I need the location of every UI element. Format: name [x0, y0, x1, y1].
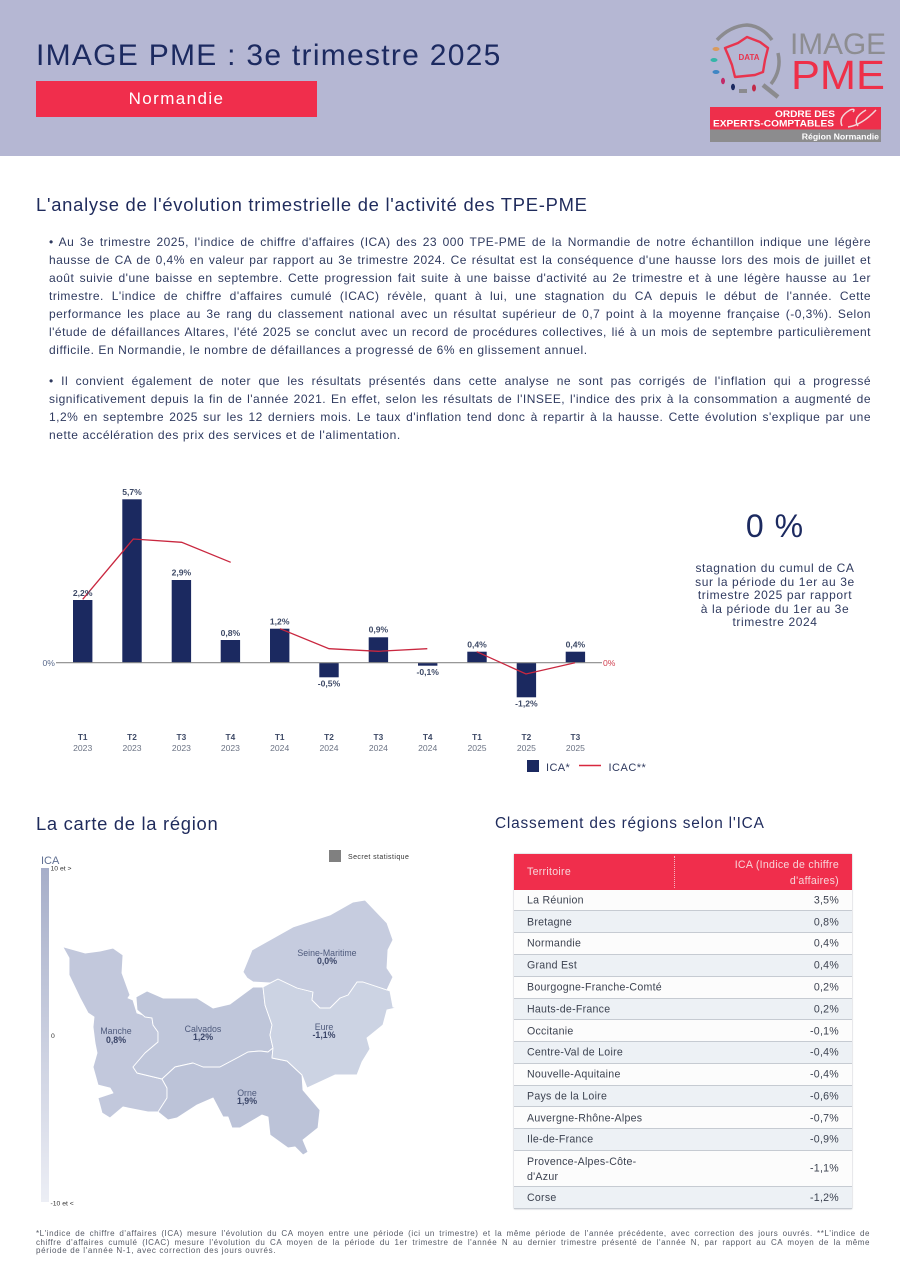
- order banner: ORDRE DES: [775, 109, 836, 120]
- zero axis: [56, 662, 602, 664]
- department labels: [100, 948, 357, 1098]
- department values: 0,8%: [106, 1035, 126, 1045]
- text block: paragraph 2: significativement depuis la fin de l'année 2021. En effet, selon les résultats de l'INSEE, l'indice des prix à la consommation a augmenté de: [49, 392, 871, 406]
- value labels: 0,4%: [467, 640, 487, 650]
- text block: paragraph 1: hausse de CA de 0,4% en valeur par rapport au 3e trimestre 2024. Ce résultat est la conséquence d'une hausse lors des mois de juillet et: [49, 253, 871, 267]
- table rows: Occitanie: [527, 1025, 574, 1037]
- year labels: 2024: [270, 743, 289, 753]
- statistical secret legend: Secret statistique: [348, 854, 409, 861]
- icon: coloured dots: [710, 47, 756, 93]
- table rows: 0,2%: [814, 1004, 839, 1016]
- icon: magnifier: [717, 25, 779, 97]
- text block: paragraph 1: août suivie d'une baisse en septembre. Cette progression fait suite à une baisse d'activité au 2e trimestre et à une légère hausse au 1er: [49, 271, 871, 285]
- text block: paragraph 1: trimestre. L'indice de chiffre d'affaires cumulé (ICAC) révèle, quant à lui, une stagnation du CA depuis le début de l'année. Cette: [49, 289, 871, 303]
- year labels: 2025: [467, 743, 487, 753]
- value labels: [73, 487, 586, 708]
- table rows: 0,2%: [814, 982, 839, 994]
- department values: 0,0%: [317, 956, 337, 966]
- quarter labels: T2: [522, 732, 532, 742]
- quarter labels: T3: [571, 732, 581, 742]
- value labels: -0,1%: [416, 667, 439, 677]
- table rows: Hauts-de-France: [527, 1004, 610, 1016]
- department labels: Manche: [100, 1026, 132, 1036]
- order banner: [710, 107, 881, 142]
- table header: ICA (Indice de chiffre: [735, 859, 839, 871]
- department labels: Orne: [237, 1088, 257, 1098]
- year labels: 2025: [517, 743, 536, 753]
- KPI description: trimestre 2024: [732, 615, 818, 629]
- heading: map: La carte de la région: [36, 813, 218, 834]
- value labels: 0,9%: [369, 624, 389, 634]
- table rows: Grand Est: [527, 960, 577, 972]
- department values: [106, 956, 337, 1106]
- table rows: 0,8%: [814, 916, 839, 928]
- legend: [527, 760, 647, 774]
- year labels: 2023: [221, 743, 240, 753]
- KPI description: [695, 561, 855, 629]
- axis zero labels: 0%: [603, 658, 616, 668]
- footnote: [36, 1229, 870, 1255]
- year labels: 2024: [418, 743, 437, 753]
- logo wordmark IMAGE: IMAGE: [790, 28, 886, 61]
- table rows: Corse: [527, 1192, 557, 1204]
- footnote: *L'indice de chiffre d'affaires (ICA) mesure l'évolution du CA moyen entre une période (ici un trimestre) et la même période de l'année précédente, avec correction des jours ouvrés. **L'indice de: [36, 1229, 870, 1238]
- text block: paragraph 2: 1,2% en septembre 2025 sur les 12 derniers mois. Le taux d'inflation tend donc à repartir à la hausse. Cette évolution s'explique par une: [49, 410, 871, 424]
- table rows: -0,9%: [810, 1134, 839, 1146]
- table header: Territoire: [527, 866, 571, 878]
- KPI description: sur la période du 1er au 3e: [695, 574, 855, 588]
- text block: paragraph 1: difficile. En Normandie, le nombre de défaillances a progressé de 6% en glissement annuel.: [49, 343, 588, 357]
- value labels: 1,2%: [270, 616, 290, 626]
- colour scale legend: [41, 855, 74, 1208]
- colour scale legend: ICA: [41, 855, 60, 867]
- map of Normandie: [41, 850, 409, 1208]
- year labels: 2025: [566, 743, 585, 753]
- KPI description: à la période du 1er au 3e: [701, 602, 849, 616]
- heading: ranking: Classement des régions selon l'ICA: [495, 815, 765, 832]
- table rows: d'Azur: [527, 1171, 558, 1183]
- KPI value: 0 %: [746, 508, 804, 544]
- table rows: Normandie: [527, 938, 581, 950]
- department: Orne: [158, 1048, 320, 1155]
- table rows: Centre-Val de Loire: [527, 1047, 623, 1059]
- ranking table: [514, 854, 852, 1209]
- text block: paragraph 1: [49, 235, 871, 357]
- department values: 1,2%: [193, 1032, 213, 1042]
- value labels: 2,9%: [172, 568, 192, 578]
- table rows: -0,4%: [810, 1047, 839, 1059]
- legend: ICAC**: [608, 762, 647, 774]
- colour scale legend: 10 et >: [50, 866, 72, 872]
- value labels: 0,8%: [221, 628, 241, 638]
- header band: [0, 0, 900, 156]
- table rows: -1,1%: [810, 1163, 839, 1175]
- quarter labels: T3: [374, 732, 384, 742]
- table header: d'affaires): [790, 875, 839, 887]
- table rows: 0,4%: [814, 960, 839, 972]
- table rows: -1,2%: [810, 1192, 839, 1204]
- year labels: [73, 743, 585, 753]
- value labels: -0,5%: [318, 678, 341, 688]
- bars: ICA: [73, 499, 585, 697]
- value labels: -1,2%: [515, 698, 538, 708]
- value labels: 0,4%: [566, 640, 586, 650]
- text block: paragraph 2: [49, 374, 871, 442]
- text block: paragraph 2: • Il convient également de noter que les résultats présentés dans cette analyse ne sont pas corrigés de l'inflation qui a progressé: [49, 374, 871, 388]
- KPI: cumulative revenue: [695, 508, 855, 629]
- colour scale legend: -10 et <: [50, 1200, 74, 1208]
- axis zero labels: 0%: [42, 658, 55, 668]
- table rows: Bretagne: [527, 916, 572, 928]
- quarter labels: [78, 732, 581, 742]
- quarter labels: T2: [324, 732, 334, 742]
- quarter labels: T1: [78, 732, 88, 742]
- table rows: Bourgogne-Franche-Comté: [527, 982, 662, 994]
- quarter labels: T1: [275, 732, 285, 742]
- department labels: Calvados: [185, 1024, 222, 1034]
- quarter labels: T3: [177, 732, 187, 742]
- region badge: Normandie: [129, 89, 224, 108]
- table rows: Auvergne-Rhône-Alpes: [527, 1112, 642, 1124]
- footnote: chiffre d'affaires cumulé (ICAC) mesure l'évolution du CA moyen de la période du 1er trimestre de l'année N au dernier trimestre présenté de l'année N, par rapport au CA moyen de la même: [36, 1238, 870, 1247]
- table rows: -0,6%: [810, 1091, 839, 1103]
- table header: [514, 854, 852, 890]
- department: Seine-Maritime: [243, 900, 393, 1008]
- value labels: 2,2%: [73, 588, 93, 598]
- footnote: période de l'année N-1, avec correction des jours ouvrés.: [36, 1246, 276, 1255]
- order banner: EXPERTS-COMPTABLES: [713, 118, 835, 130]
- department values: 1,9%: [237, 1096, 257, 1106]
- department: Eure: [263, 979, 396, 1088]
- table rows: -0,4%: [810, 1069, 839, 1081]
- table rows: -0,1%: [810, 1025, 839, 1037]
- legend: ICA*: [546, 762, 571, 774]
- table rows: Pays de la Loire: [527, 1091, 607, 1103]
- order banner: Région Normandie: [802, 132, 879, 142]
- table rows: Nouvelle-Aquitaine: [527, 1069, 621, 1081]
- quarter labels: T4: [226, 732, 236, 742]
- line: ICAC: [83, 539, 575, 674]
- logo wordmark PME: PME: [791, 52, 885, 98]
- icon: France outline: [725, 37, 768, 77]
- table rows: 3,5%: [814, 895, 839, 907]
- axis zero labels: [42, 658, 616, 668]
- department labels: Seine-Maritime: [297, 948, 357, 958]
- year labels: 2023: [172, 743, 191, 753]
- region badge: [36, 81, 317, 117]
- year labels: 2023: [73, 743, 92, 753]
- department: Manche: [63, 947, 167, 1118]
- logo: [710, 23, 886, 142]
- department labels: Eure: [315, 1022, 333, 1032]
- text block: paragraph 1: performance les place au 3e rang du classement national avec un résultat supérieur de 0,7 point à la moyenne française (-0,3%). Selon: [49, 307, 871, 321]
- table rows: Ile-de-France: [527, 1134, 593, 1146]
- table rows: La Réunion: [527, 895, 584, 907]
- text block: paragraph 1: • Au 3e trimestre 2025, l'indice de chiffre d'affaires (ICA) des 23 000 TPE-PME de la Normandie de notre échantillon indique une légère: [49, 235, 871, 249]
- department values: -1,1%: [313, 1030, 336, 1040]
- text block: paragraph 1: l'étude de défaillances Altares, l'été 2025 se conclut avec un record de procédures collectives, lié à un mois de septembre particulièrement: [49, 325, 871, 339]
- bar and line chart: ICA and ICAC: [42, 487, 647, 774]
- quarter labels: T2: [127, 732, 137, 742]
- quarter labels: T1: [472, 732, 482, 742]
- table rows: 0,4%: [814, 938, 839, 950]
- text block: paragraph 2: nette accélération des prix des services et de l'alimentation.: [49, 428, 401, 442]
- quarter labels: T4: [423, 732, 433, 742]
- department: Calvados: [133, 987, 273, 1079]
- year labels: 2024: [319, 743, 339, 753]
- KPI description: stagnation du cumul de CA: [695, 561, 855, 575]
- table rows: Provence-Alpes-Côte-: [527, 1156, 636, 1168]
- logo DATA text: DATA: [738, 53, 760, 62]
- title: IMAGE PME : 3e trimestre 2025: [36, 39, 502, 72]
- colour scale legend: 0: [51, 1033, 55, 1040]
- KPI description: trimestre 2025 par rapport: [698, 588, 852, 602]
- heading: analysis: L'analyse de l'évolution trimestrielle de l'activité des TPE-PME: [36, 194, 588, 215]
- statistical secret legend: [329, 850, 409, 862]
- value labels: 5,7%: [122, 487, 142, 497]
- table rows: -0,7%: [810, 1112, 839, 1124]
- year labels: 2024: [369, 743, 388, 753]
- table rows: [514, 895, 852, 1209]
- year labels: 2023: [122, 743, 142, 753]
